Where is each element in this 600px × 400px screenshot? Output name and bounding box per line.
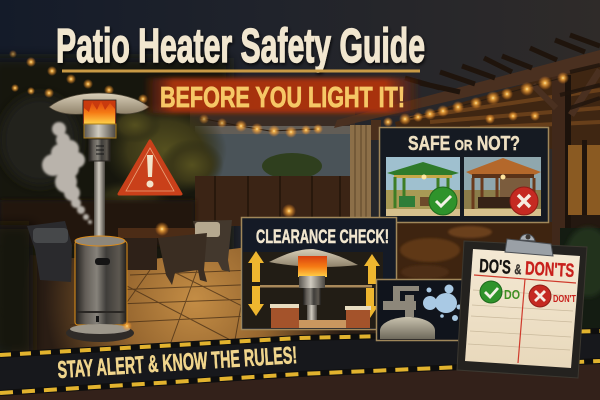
clearance ledge line xyxy=(260,285,372,288)
heater dome reflector xyxy=(49,93,149,114)
olive foliage lit by the heater xyxy=(90,102,227,216)
candle on ledge xyxy=(282,204,296,218)
wooden fence xyxy=(0,176,355,245)
string lights xyxy=(9,50,569,138)
soap bubbles xyxy=(423,284,462,321)
brick blocks xyxy=(270,304,371,328)
dont column xyxy=(529,285,576,307)
heater flame box xyxy=(83,100,116,125)
title underline xyxy=(62,70,420,72)
panel heading: SAFE OR NOT? xyxy=(408,133,520,155)
unsafe enclosed gazebo scene xyxy=(464,157,541,216)
smoke plume xyxy=(42,122,92,224)
safe gazebo scene xyxy=(386,157,460,216)
panel: clearance check xyxy=(242,218,396,330)
house wall in background xyxy=(190,110,355,179)
tank valve xyxy=(383,286,419,317)
do column: DO xyxy=(504,287,520,302)
wicker chair back xyxy=(193,220,232,272)
wicker chair front xyxy=(158,233,207,285)
outdoor furniture set xyxy=(27,204,296,285)
propane tank xyxy=(380,317,435,339)
paper ruled lines xyxy=(468,290,574,350)
dining table xyxy=(118,228,208,270)
dont column: DON'T xyxy=(553,293,576,305)
clipboard heading: DO'S & DON'TS xyxy=(479,256,575,282)
icon: left arrows xyxy=(248,251,264,316)
heater tank xyxy=(75,236,127,325)
table rule lines xyxy=(474,275,576,363)
clipboard clip xyxy=(505,234,553,256)
panel: gas tank leak check xyxy=(376,280,464,340)
clipboard: dos and donts xyxy=(457,234,587,378)
heater collar xyxy=(84,124,116,161)
pergola structure xyxy=(334,35,600,345)
icon: green check xyxy=(429,187,457,215)
warning triangle icon xyxy=(119,141,181,194)
ground below tape xyxy=(0,358,600,400)
subtitle banner: BEFORE YOU LIGHT IT! xyxy=(160,82,405,114)
mini heater xyxy=(269,249,358,328)
candle on table xyxy=(155,222,169,236)
garden trees xyxy=(0,58,230,348)
paper sheet xyxy=(465,249,580,368)
armchair left xyxy=(27,221,72,282)
caution tape xyxy=(0,329,600,400)
patio heater xyxy=(49,93,149,342)
patio paving floor xyxy=(0,225,400,356)
panel heading: CLEARANCE CHECK! xyxy=(256,227,389,248)
icon: right arrows xyxy=(362,254,380,318)
clearance diagram background xyxy=(243,252,383,328)
tape slogan: STAY ALERT & KNOW THE RULES! xyxy=(57,342,298,384)
subtitle banner xyxy=(146,78,418,114)
icon: red cross xyxy=(510,187,538,215)
do column xyxy=(480,281,520,303)
panel: safe or not xyxy=(380,128,548,222)
heater pole xyxy=(94,160,105,240)
heater foot xyxy=(66,321,134,342)
